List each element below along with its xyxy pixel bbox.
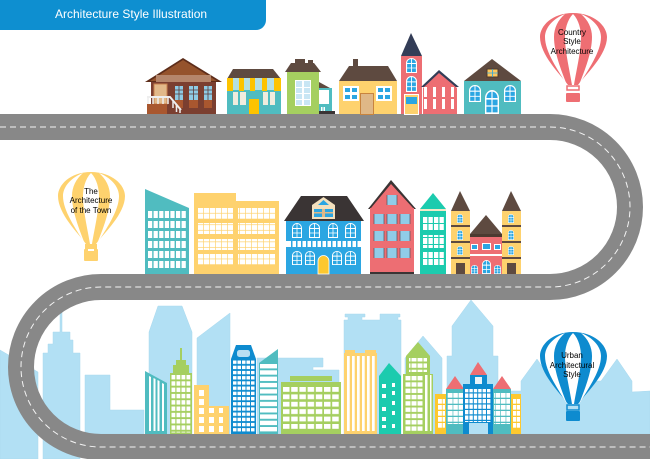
title: Architecture Style Illustration (55, 7, 207, 21)
teal striped tower (145, 371, 167, 434)
road (0, 127, 650, 447)
balloon label: Architectural (550, 361, 594, 370)
brown bungalow (145, 58, 222, 114)
balloon label: Style (563, 370, 581, 379)
green narrow house (420, 193, 446, 274)
teal house (464, 59, 521, 114)
red tall house (368, 180, 416, 274)
yellow office block (194, 193, 279, 274)
balloon label: Architecture (70, 196, 113, 205)
civic building (435, 362, 521, 434)
balloon label: of the Town (71, 206, 111, 215)
red townhouse (421, 70, 459, 114)
green antenna tower (170, 348, 192, 434)
blue mansion (284, 196, 364, 274)
twin tower house (451, 191, 521, 274)
urban background skyline (0, 300, 650, 459)
balloon: urban (540, 332, 607, 421)
balloon label: Style (563, 37, 581, 46)
yellow cottage (339, 59, 397, 114)
teal shop (227, 69, 281, 114)
green gabled tower (403, 342, 433, 434)
yellow striped tower (344, 350, 377, 434)
blue skyscraper (231, 345, 256, 434)
teal slanted office (145, 189, 189, 274)
green wide block (281, 376, 341, 434)
yellow stepped block (194, 385, 229, 434)
balloon label: The (84, 187, 98, 196)
title banner (0, 0, 266, 30)
balloon label: Architecture (551, 47, 594, 56)
teal banded tower (259, 349, 278, 434)
balloon: town (58, 172, 125, 261)
green house (285, 59, 335, 114)
green teal tower (379, 363, 401, 434)
red tower (401, 33, 422, 114)
balloon: country style (540, 13, 607, 102)
balloon label: Urban (561, 351, 583, 360)
balloon label: Country (558, 28, 586, 37)
